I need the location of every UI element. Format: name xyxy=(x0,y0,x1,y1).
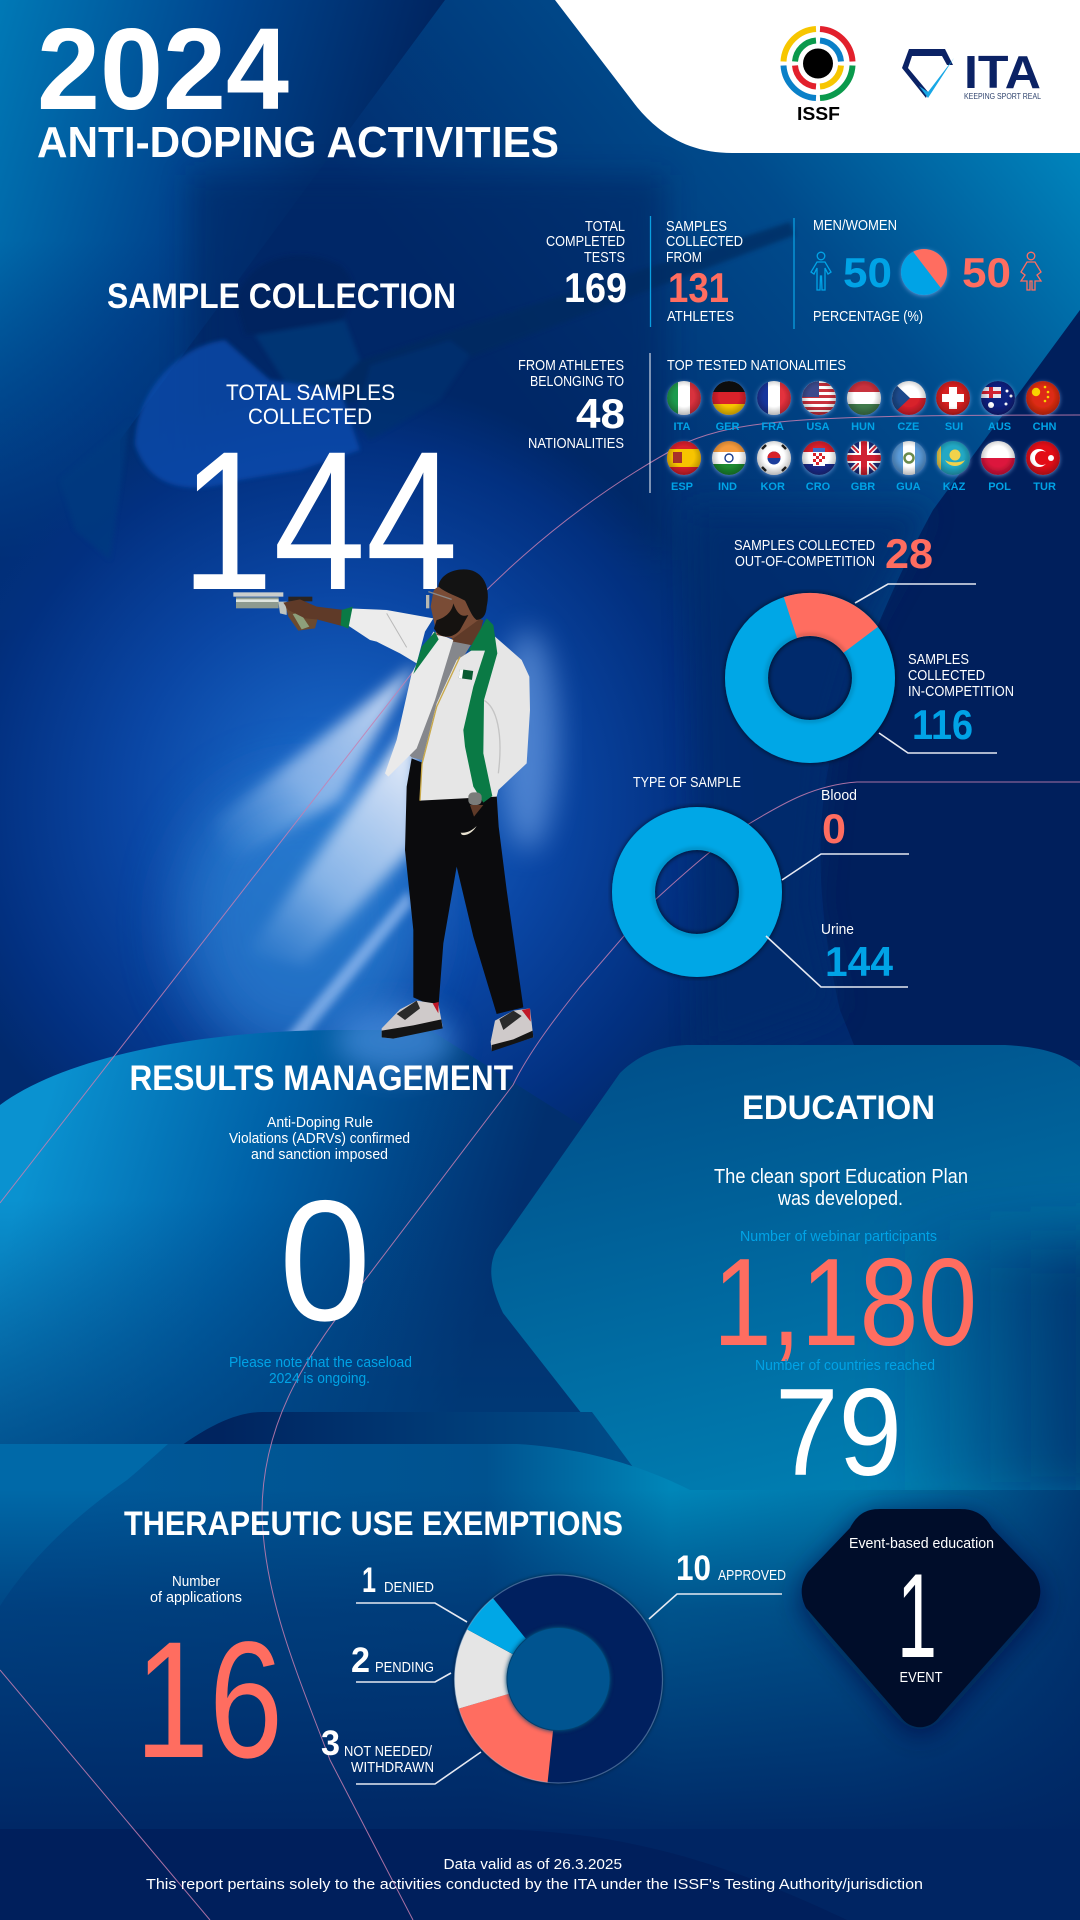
label: blood xyxy=(782,787,909,880)
ADRV description: Anti-Doping Rule xyxy=(267,1114,373,1131)
title: 2024 xyxy=(37,4,289,134)
label: urine: 144 xyxy=(825,938,894,985)
flag labels: USA xyxy=(806,421,830,433)
label: not needed or withdrawn: 3 xyxy=(321,1724,340,1763)
flag: USA xyxy=(802,381,836,415)
heading: therapeutic use exemptions: THERAPEUTIC USE EXEMPTIONS xyxy=(124,1505,623,1543)
icon: woman xyxy=(1021,252,1041,290)
flag labels: CZE xyxy=(897,421,919,433)
stat: total completed tests: TESTS xyxy=(584,249,625,266)
education plan text: was developed. xyxy=(777,1188,903,1210)
out-of-competition label: OUT-OF-COMPETITION xyxy=(735,553,875,570)
stat: nationalities: 48 xyxy=(576,390,625,437)
ADRV description: and sanction imposed xyxy=(251,1146,388,1163)
flag patch xyxy=(459,669,473,680)
label: pending: 2 xyxy=(351,1641,370,1680)
panel: event-based education: EVENT xyxy=(900,1669,942,1686)
flag labels: HUN xyxy=(851,421,875,433)
flag: India xyxy=(712,441,746,476)
flag: Australia xyxy=(981,381,1015,415)
stat: men and women percentage: PERCENTAGE (%) xyxy=(813,308,923,325)
panel: therapeutic use exemptions background xyxy=(0,1412,1080,1840)
logo: ITA: ITA xyxy=(964,46,1041,98)
ADRV description xyxy=(229,1114,410,1163)
athlete with air pistol xyxy=(233,569,533,1051)
countries reached: 79 xyxy=(775,1364,902,1502)
footer note: Data valid as of 26.3.2025 xyxy=(444,1856,622,1873)
flag: Germany xyxy=(712,381,746,416)
label: blood: Blood xyxy=(821,787,857,804)
right shoe xyxy=(491,1008,533,1051)
flag labels: FRA xyxy=(761,421,784,433)
stat: total completed tests xyxy=(546,218,627,311)
logo: ISSF xyxy=(784,29,852,124)
donut chart: type of sample xyxy=(634,828,760,956)
arm and hand xyxy=(283,599,344,626)
total samples collected: TOTAL SAMPLES xyxy=(226,380,395,405)
panel: event-based education: 1 xyxy=(897,1549,937,1683)
label: approved: 10 xyxy=(676,1549,711,1588)
flag labels: GUA xyxy=(896,481,921,493)
flag labels xyxy=(671,421,1057,493)
label: denied: DENIED xyxy=(384,1579,434,1596)
light rays behind athlete xyxy=(180,630,558,1062)
logo: ITA: KEEPING SPORT REAL xyxy=(964,92,1041,101)
stat: men and women percentage xyxy=(811,217,1041,325)
flag: Czechia xyxy=(892,381,926,415)
stat: samples collected from athletes: FROM xyxy=(666,249,702,266)
flag labels: TUR xyxy=(1033,481,1056,493)
stat: nationalities: NATIONALITIES xyxy=(528,435,624,452)
flag labels: SUI xyxy=(945,421,963,433)
label: not needed or withdrawn: WITHDRAWN xyxy=(351,1759,434,1776)
flag labels: CRO xyxy=(806,481,831,493)
label: pending: PENDING xyxy=(375,1659,434,1676)
note: caseload: Please note that the caseload xyxy=(229,1354,412,1371)
number of applications: 16 xyxy=(135,1608,283,1793)
flag: Korea xyxy=(757,441,791,475)
panel: event-based education xyxy=(802,1509,1040,1727)
countries reached: Number of countries reached xyxy=(755,1357,935,1374)
top tested nationalities: TOP TESTED NATIONALITIES xyxy=(667,357,846,374)
flag: Turkey xyxy=(1026,441,1060,475)
stat: nationalities: FROM ATHLETES xyxy=(518,357,624,374)
webinar participants: 1,180 xyxy=(713,1234,977,1372)
label: not needed or withdrawn xyxy=(321,1724,481,1784)
head xyxy=(426,569,488,638)
top tested nationalities xyxy=(667,357,1060,493)
stat: men and women percentage: 50 xyxy=(843,249,892,296)
pistol xyxy=(233,592,317,631)
neck xyxy=(450,617,483,645)
total samples collected: 144 xyxy=(181,410,458,631)
stat: total completed tests: TOTAL xyxy=(585,218,625,235)
in-competition label: IN-COMPETITION xyxy=(908,683,1014,700)
flag labels: GBR xyxy=(851,481,875,493)
jacket green stripes xyxy=(463,618,497,803)
label: not needed or withdrawn: NOT NEEDED/ xyxy=(344,1743,433,1760)
donut chart: in and out of competition xyxy=(746,614,874,742)
grey shirt xyxy=(402,638,471,761)
logo: ITA xyxy=(902,46,1041,101)
note: caseload: 2024 is ongoing. xyxy=(269,1370,370,1387)
pie: men women split xyxy=(898,248,950,298)
flag labels: ESP xyxy=(671,481,693,493)
flag labels: KOR xyxy=(760,481,785,493)
out-of-competition label xyxy=(734,530,976,603)
jacket sleeve xyxy=(347,608,433,663)
flag: Guatemala xyxy=(892,441,927,475)
in-competition label xyxy=(879,651,1014,753)
heading: results management: RESULTS MANAGEMENT xyxy=(130,1059,513,1098)
education plan text: The clean sport Education Plan xyxy=(714,1166,968,1188)
ADRV description: Violations (ADRVs) confirmed xyxy=(229,1130,410,1147)
panel: education background xyxy=(491,1045,1080,1520)
education plan text xyxy=(714,1166,968,1210)
label: blood: 0 xyxy=(822,805,846,852)
stat: men and women percentage: MEN/WOMEN xyxy=(813,217,897,234)
footer note xyxy=(146,1856,923,1893)
heading: type of sample: TYPE OF SAMPLE xyxy=(633,774,741,791)
stat: men and women percentage: 50 xyxy=(962,249,1011,296)
label: denied xyxy=(356,1561,467,1622)
stat: total completed tests: 169 xyxy=(564,264,627,311)
flag: Poland xyxy=(981,441,1015,475)
jacket right panel xyxy=(420,637,530,801)
label: urine xyxy=(766,921,908,987)
footer note: This report pertains solely to the activities conducted by the ITA under the ISSF's Testing Authority/jurisdiction xyxy=(146,1876,923,1893)
label: urine: Urine xyxy=(821,921,854,938)
flag: Switzerland xyxy=(936,381,970,415)
stat: total completed tests: COMPLETED xyxy=(546,233,625,250)
flag: Croatia xyxy=(802,441,836,476)
label: pending xyxy=(351,1641,451,1682)
flag labels: AUS xyxy=(988,421,1011,433)
title xyxy=(37,4,559,167)
flag labels: GER xyxy=(716,421,739,433)
note: caseload xyxy=(229,1354,412,1387)
stat: samples collected from athletes xyxy=(666,218,743,325)
heading: sample collection: SAMPLE COLLECTION xyxy=(107,277,456,316)
flag: Italy xyxy=(667,381,702,415)
flag labels: KAZ xyxy=(943,481,966,493)
stat: samples collected from athletes: 131 xyxy=(668,264,729,311)
flag: China xyxy=(1026,381,1060,415)
flag labels: ITA xyxy=(674,421,691,433)
heading: education: EDUCATION xyxy=(742,1089,935,1127)
number of applications: of applications xyxy=(150,1589,242,1606)
stat: nationalities: BELONGING TO xyxy=(530,373,624,390)
logo: ISSF: ISSF xyxy=(797,104,840,124)
flag: France xyxy=(757,381,792,415)
logo panel xyxy=(555,0,1080,153)
panel: event-based education: Event-based education xyxy=(849,1535,994,1552)
webinar participants: Number of webinar participants xyxy=(740,1228,937,1245)
panel: results management background xyxy=(0,1006,700,1500)
watch and hand xyxy=(468,792,483,817)
out-of-competition label: 28 xyxy=(885,530,933,577)
flag labels: POL xyxy=(988,481,1011,493)
stat: samples collected from athletes: COLLECTED xyxy=(666,233,743,250)
stat: samples collected from athletes: ATHLETES xyxy=(667,308,734,325)
label: denied: 1 xyxy=(362,1561,376,1600)
flags xyxy=(667,381,1060,476)
panel: footer background xyxy=(0,1829,1080,1920)
number of applications: Number xyxy=(172,1573,220,1590)
flag: Hungary xyxy=(847,381,881,416)
flag: Great Britain xyxy=(847,441,881,475)
total samples collected: COLLECTED xyxy=(248,404,372,429)
flag: Spain xyxy=(667,441,701,475)
flag: Kazakhstan xyxy=(936,441,970,475)
donut chart: TUE outcomes xyxy=(454,1575,662,1783)
stat: nationalities xyxy=(518,357,625,452)
number: ADRVs: 0 xyxy=(279,1165,371,1357)
number of applications xyxy=(135,1573,283,1793)
flag labels: CHN xyxy=(1033,421,1057,433)
out-of-competition label: SAMPLES COLLECTED xyxy=(734,537,875,554)
icon: man xyxy=(811,252,831,290)
label: approved xyxy=(649,1549,786,1619)
background photo: rifle shooter xyxy=(60,222,795,560)
trousers xyxy=(405,758,523,1014)
label: approved: APPROVED xyxy=(718,1567,786,1584)
in-competition label: COLLECTED xyxy=(908,667,985,684)
in-competition label: 116 xyxy=(912,701,973,748)
decorative thin curves xyxy=(0,415,1080,1203)
in-competition label: SAMPLES xyxy=(908,651,969,668)
title: ANTI-DOPING ACTIVITIES xyxy=(37,118,559,167)
left shoe xyxy=(382,1001,443,1039)
flag labels: IND xyxy=(718,481,737,493)
jacket left panel xyxy=(385,632,453,777)
stat: samples collected from athletes: SAMPLES xyxy=(666,218,727,235)
